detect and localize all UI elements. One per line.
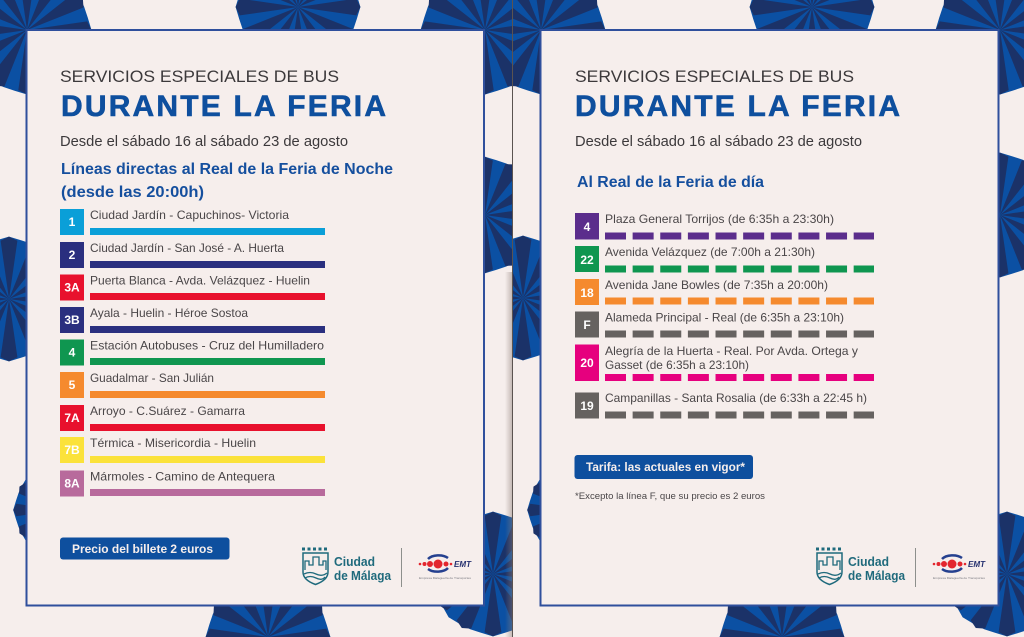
line 4: 4 [69,346,76,360]
line 2: Ciudad Jardín - San José - A. Huerta [90,241,284,255]
heading: servicios especiales: SERVICIOS ESPECIALES DE BUS [60,67,339,86]
line 7A [60,404,325,431]
line 3A [60,274,325,300]
line 22: 22 [580,253,594,267]
line 5: Guadalmar - San Julián [90,371,214,385]
line 7A: 7A [64,411,80,425]
line 5 [60,371,325,398]
logo: EMT: EMT [968,560,986,569]
line 7B: Térmica - Misericordia - Huelin [90,436,256,450]
line 3B: 3B [64,313,80,327]
line 7B [60,436,325,463]
line 2: 2 [69,248,76,262]
line F: F [583,318,591,332]
line 4 [60,338,325,366]
line F: Alameda Principal - Real (de 6:35h a 23:10h) [605,310,844,324]
line 20 [575,344,874,381]
logo: ciudad de malaga: Ciudad [848,554,889,569]
panel: left poster [26,30,484,606]
line 4: 4 [584,220,591,234]
footnote: *Excepto la línea F, que su precio es 2 euros [575,491,765,502]
line 3B [60,306,325,333]
line 8A [60,470,325,496]
price button [60,538,230,560]
line 1 [60,208,325,235]
price button: Precio del billete 2 euros [72,544,213,556]
subheading: from 20:00h: (desde las 20:00h) [61,184,204,201]
line 20: Gasset (de 6:35h a 23:10h) [605,358,749,372]
line 22: Avenida Velázquez (de 7:00h a 21:30h) [605,245,815,259]
divider between posters [512,0,513,637]
line 19 [575,391,874,418]
line 3A: Puerta Blanca - Avda. Velázquez - Huelin [90,274,310,288]
line 1: 1 [69,215,76,229]
logo: ciudad de malaga [816,549,906,584]
title: durante la feria: DURANTE LA FERIA [575,90,900,123]
line 4: Estación Autobuses - Cruz del Humilladero [90,338,324,352]
line 3A: 3A [64,280,80,294]
logo: EMT: Empresa Malagueña de Transportes [419,577,472,580]
line F [575,310,874,338]
logo: EMT: Empresa Malagueña de Transportes [933,577,986,580]
date line: Desde el sábado 16 al sábado 23 de agosto [575,133,862,150]
panel: right poster [540,30,998,606]
logo: ciudad de malaga: de Málaga [334,568,392,583]
logo: EMT [933,555,986,580]
logo: ciudad de malaga: de Málaga [848,568,906,583]
line 19: Campanillas - Santa Rosalia (de 6:33h a 22:45 h) [605,391,867,405]
line 5: 5 [69,378,76,392]
date line: Desde el sábado 16 al sábado 23 de agosto [60,133,348,150]
line 18 [575,278,874,305]
line 18: 18 [580,286,594,300]
fare button [574,455,753,479]
logo: ciudad de malaga: Ciudad [334,554,375,569]
line 3B: Ayala - Huelin - Héroe Sostoa [90,306,248,320]
decorative rosettes: left poster [0,0,555,637]
line 2 [60,241,325,268]
line 20: 20 [580,356,594,370]
line 1: Ciudad Jardín - Capuchinos- Victoria [90,208,289,222]
fare button: Tarifa: las actuales en vigor* [586,462,746,474]
line 7A: Arroyo - C.Suárez - Gamarra [90,404,245,418]
title: durante la feria: DURANTE LA FERIA [61,90,386,123]
line 8A: Mármoles - Camino de Antequera [90,470,275,484]
line 18: Avenida Jane Bowles (de 7:35h a 20:00h) [605,278,828,292]
subheading: day service: Al Real de la Feria de día [577,174,764,191]
logo: EMT: EMT [454,560,472,569]
line 4: Plaza General Torrijos (de 6:35h a 23:30h) [605,212,834,226]
subheading: night lines: Líneas directas al Real de la Feria de Noche [61,161,393,178]
line 4 [575,212,874,240]
logo: EMT [419,555,472,580]
line 8A: 8A [64,476,80,490]
line 7B: 7B [64,443,80,457]
line 20: Alegría de la Huerta - Real. Por Avda. Ortega y [605,344,858,358]
decorative rosettes: right poster [461,0,1024,637]
logo: ciudad de malaga [302,549,392,584]
heading: servicios especiales: SERVICIOS ESPECIALES DE BUS [575,67,854,86]
line 19: 19 [580,399,594,413]
line 22 [575,245,874,272]
